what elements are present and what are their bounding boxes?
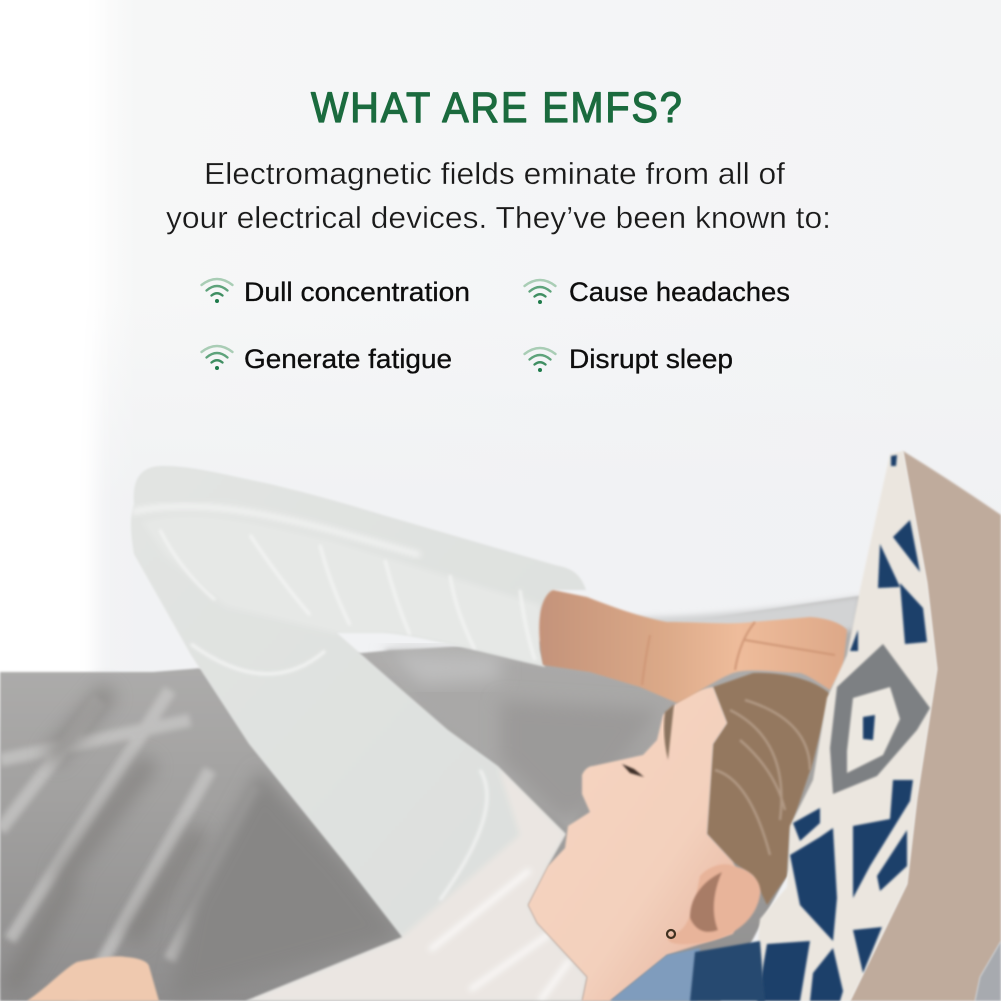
ear <box>668 864 760 944</box>
sofa <box>0 596 880 1001</box>
item: disrupt sleep: Disrupt sleep <box>569 344 733 374</box>
list: effects of EMFs <box>202 277 790 374</box>
pillow beige back <box>850 451 1001 1001</box>
intro text <box>166 156 831 235</box>
white sleeve and torso <box>120 460 600 1001</box>
eye <box>622 764 644 777</box>
lower hand <box>27 956 159 1001</box>
face and neck <box>528 687 745 1001</box>
patterned pillow band <box>753 451 937 1001</box>
title: WHAT ARE EMFS? <box>311 83 682 131</box>
blue knit scarf <box>610 941 765 1001</box>
eyebrow <box>664 704 674 760</box>
intro text: Electromagnetic fields eminate from all of <box>204 156 785 191</box>
hair <box>707 673 830 905</box>
hand on forehead <box>539 590 847 703</box>
earring <box>667 930 675 938</box>
item: generate fatigue: Generate fatigue <box>244 344 452 374</box>
grey sofa corner <box>975 941 1001 1001</box>
item: cause headaches: Cause headaches <box>569 277 790 307</box>
item: dull concentration: Dull concentration <box>244 277 470 307</box>
intro text: your electrical devices. They’ve been known to: <box>166 200 831 235</box>
photo: woman resting on sofa with headache <box>0 451 1001 1001</box>
